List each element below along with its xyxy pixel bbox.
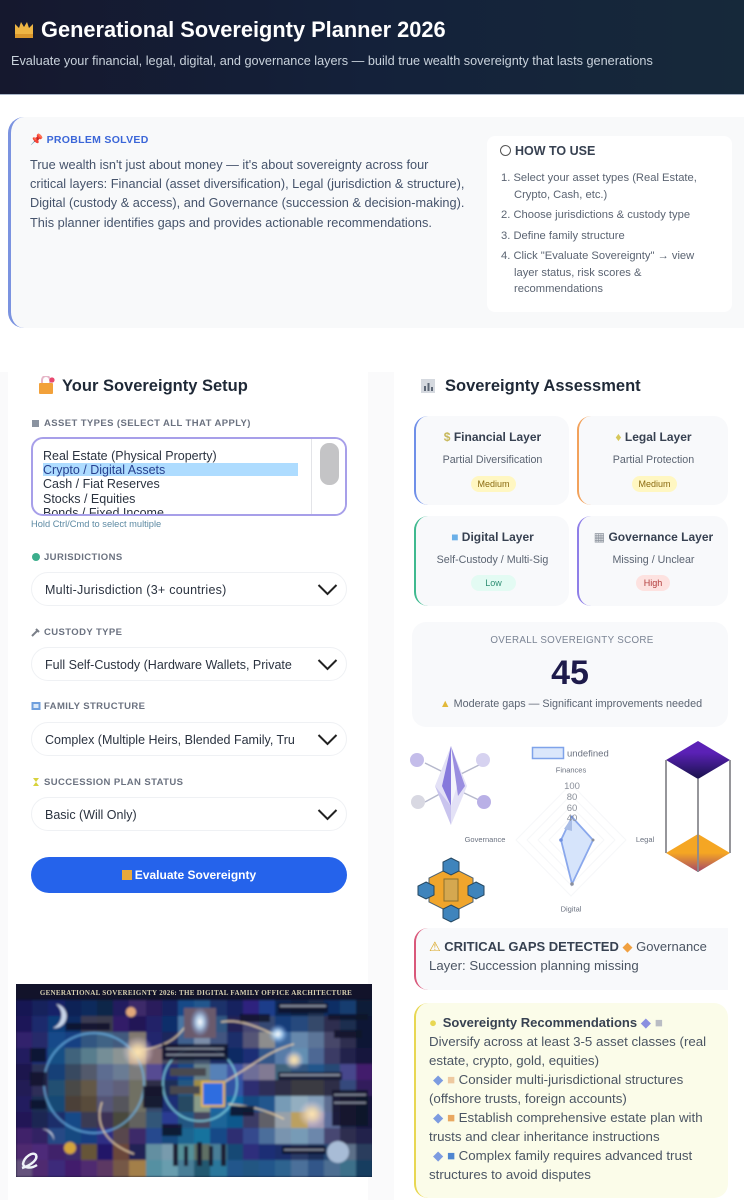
portal [184, 1008, 216, 1038]
recommendations text: ◆ ■ Complex family requires advanced trust [433, 1148, 692, 1163]
label: custody type: CUSTODY TYPE [44, 627, 122, 638]
scale ticks: 40 [567, 813, 577, 824]
card: financial layer [414, 416, 569, 505]
axis labels: Digital [561, 904, 582, 914]
illustration title: GENERATIONAL SOVEREIGNTY 2026: THE DIGITAL FAMILY OFFICE ARCHITECTURE [40, 989, 352, 997]
select: succession plan: Basic (Will Only) [45, 808, 137, 822]
small planets [53, 1004, 67, 1028]
card: governance layer [577, 516, 728, 606]
heading: problem solved: 📌 PROBLEM SOLVED [30, 134, 149, 146]
icon: crown [15, 22, 33, 38]
button: evaluate sovereignty [31, 857, 347, 893]
recommendations text: ◆ ■ Establish comprehensive estate plan with [433, 1110, 703, 1125]
recommendations text: (offshore trusts, foreign accounts) [429, 1091, 627, 1106]
recommendations text [429, 1015, 706, 1182]
subtitle: Evaluate your financial, legal, digital, and governance layers — build true wealth sovereignty that lasts generations [11, 54, 653, 68]
recommendations text: ◆ ■ Consider multi-jurisdictional structures [433, 1072, 683, 1087]
icon: isometric vault prism [665, 741, 731, 872]
header banner [0, 0, 744, 95]
legend: undefined [567, 748, 609, 760]
radar data shape [559, 816, 594, 886]
dark caption strips [30, 1003, 368, 1154]
axis labels: Legal [636, 835, 655, 844]
how to use steps: recommendations [514, 283, 603, 295]
panel: how to use [487, 136, 732, 312]
card: governance layer: ▦ Governance Layer [594, 530, 713, 544]
callout: critical gaps [414, 928, 728, 990]
score note: ▲ Moderate gaps — Significant improvements needed [440, 698, 702, 710]
radar grid [516, 784, 626, 896]
how to use steps: 4. Click "Evaluate Sovereignty" → view [501, 250, 694, 262]
card: financial layer: Partial Diversification [443, 454, 542, 466]
card: legal layer: Partial Protection [613, 454, 694, 466]
select: custody type [31, 647, 347, 681]
asset types listbox: Cash / Fiat Reserves [43, 477, 160, 491]
label: succession plan: SUCCESSION PLAN STATUS [44, 777, 183, 788]
how to use steps: 3. Define family structure [501, 230, 625, 242]
scale ticks: 60 [567, 803, 577, 814]
panel: assessment [394, 362, 744, 1200]
button: evaluate sovereignty: Evaluate Sovereignty [135, 868, 256, 882]
select: jurisdictions [31, 572, 347, 606]
scrollbar [311, 439, 347, 518]
globe ring, sphere ring, light paths [44, 1033, 144, 1133]
select: family structure: Complex (Multiple Heirs, Blended Family, Tru [45, 733, 295, 747]
card: legal layer: ♦ Legal Layer [615, 430, 692, 444]
asset types listbox [31, 437, 347, 516]
problem description [30, 157, 464, 230]
logo mark [22, 1154, 37, 1168]
score label: OVERALL SOVEREIGNTY SCORE [490, 635, 654, 646]
icon: crystal spire network [410, 746, 491, 825]
how to use steps: 1. Select your asset types (Real Estate, [501, 172, 697, 184]
card: digital layer: ■ Digital Layer [451, 530, 534, 544]
select: jurisdictions: Multi-Jurisdiction (3+ countries) [45, 583, 227, 597]
axis labels [465, 766, 655, 914]
card: financial layer: Medium [477, 479, 510, 489]
card: governance layer: Missing / Unclear [613, 554, 694, 566]
illustration: digital family office architecture [16, 984, 372, 1177]
scale ticks: 80 [567, 792, 577, 803]
label: asset types: ASSET TYPES (SELECT ALL THAT APPLY) [44, 418, 251, 429]
callout: critical gaps: ⚠ CRITICAL GAPS DETECTED ◆ Governance [429, 939, 707, 954]
how to use steps: 2. Choose jurisdictions & custody type [501, 209, 690, 221]
select: family structure [31, 722, 347, 756]
icon: blockchain hexagon [418, 858, 484, 922]
assessment heading: Sovereignty Assessment [445, 377, 641, 395]
recommendations text: structures to avoid disputes [429, 1167, 591, 1182]
central screen [202, 1082, 224, 1106]
problem description: critical layers: Financial (asset diversification), Legal (jurisdiction & structure), [30, 176, 464, 191]
panel: overall score [412, 622, 728, 727]
select: succession plan [31, 797, 347, 831]
card: digital layer: Low [485, 578, 502, 588]
axis labels: Governance [465, 835, 505, 844]
label: family structure: FAMILY STRUCTURE [44, 701, 145, 712]
legend [532, 748, 609, 760]
problem description: This planner identifies gaps and provides actionable recommendations. [30, 215, 432, 230]
heading: how to use: HOW TO USE [515, 144, 595, 158]
recommendations text: Diversify across at least 3-5 asset classes (real [429, 1034, 706, 1049]
page background [0, 372, 744, 1200]
card: digital layer: Self-Custody / Multi-Sig [437, 554, 548, 566]
scale ticks: 100 [564, 781, 580, 792]
label: jurisdictions: JURISDICTIONS [44, 552, 123, 563]
card: governance layer: High [644, 578, 662, 588]
radar chart [465, 746, 655, 914]
how to use steps: Crypto, Cash, etc.) [514, 189, 607, 201]
recommendations text: estate, crypto, gold, equities) [429, 1053, 599, 1068]
asset types listbox: Stocks / Equities [43, 492, 135, 506]
callout: critical gaps: Layer: Succession planning missing [429, 958, 639, 973]
asset types listbox: Real Estate (Physical Property) [43, 449, 217, 463]
axis labels: Finances [556, 766, 586, 774]
caption highlights [166, 1005, 366, 1150]
problem description: Digital (custody & access), and Governance (succession & decision-making). [30, 195, 464, 210]
problem description: True wealth isn't just about money — it's about sovereignty across four [30, 157, 428, 172]
recommendations text: ● Sovereignty Recommendations ◆ ■ [429, 1015, 663, 1030]
card: legal layer [577, 416, 728, 505]
score value: 45 [551, 654, 589, 692]
hint text: Hold Ctrl/Cmd to select multiple [31, 519, 161, 529]
family silhouettes [173, 1142, 226, 1166]
card: financial layer: $ Financial Layer [444, 430, 541, 444]
panel: setup [8, 372, 368, 1200]
panel: recommendations [414, 1003, 728, 1198]
selected option highlight [43, 463, 298, 476]
card: digital layer [414, 516, 569, 606]
select: custody type: Full Self-Custody (Hardware Wallets, Private [45, 658, 292, 672]
recommendations text: trusts and clear inheritance instructions [429, 1129, 660, 1144]
asset types listbox: Crypto / Digital Assets [43, 463, 165, 477]
how to use steps: layer status, risk scores & [514, 267, 641, 279]
title: Generational Sovereignty Planner 2026 [41, 17, 446, 42]
setup heading: Your Sovereignty Setup [62, 377, 248, 395]
how to use steps [501, 172, 697, 295]
panel: problem solved [8, 117, 744, 328]
scale ticks [564, 781, 580, 824]
card: legal layer: Medium [638, 479, 670, 489]
